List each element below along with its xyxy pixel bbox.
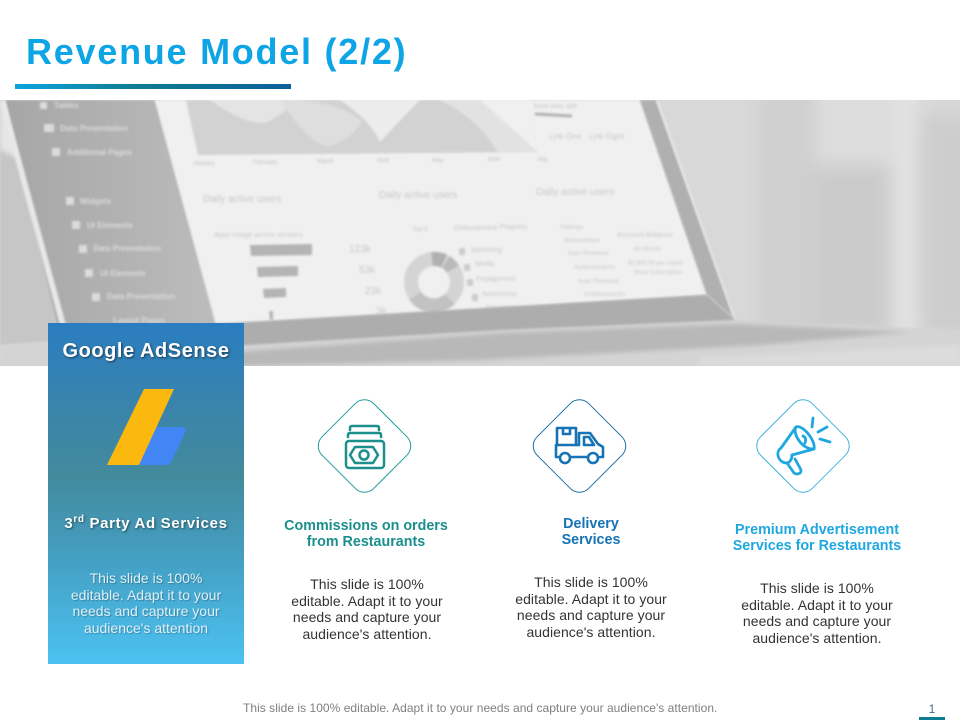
panel subheading: 3rd Party Ad Services: [64, 514, 228, 532]
background photo: laptop dashboard: Subscription: [564, 237, 600, 244]
text: commissions body: editable. Adapt it to your: [291, 592, 443, 608]
background photo: laptop dashboard: Awareness: [482, 291, 517, 298]
panel heading: Google AdSense: [62, 340, 230, 362]
background photo: laptop dashboard: Engagement: [476, 276, 516, 283]
background photo: laptop dashboard: [0, 100, 960, 366]
text: delivery body: This slide is 100%: [534, 574, 648, 590]
background photo: laptop dashboard: Daily active users: [379, 190, 457, 201]
icon: AdSense logo: [107, 389, 186, 465]
background photo: laptop dashboard: Disbursement: [454, 225, 497, 232]
icon: cash stack in diamond: [318, 399, 412, 493]
heading: delivery: Delivery: [563, 516, 619, 532]
background photo: laptop dashboard: Link One: [549, 132, 582, 141]
background photo: laptop dashboard: March: [317, 159, 334, 165]
donut: [411, 259, 457, 306]
title: Revenue Model (2/2): [26, 31, 407, 72]
background photo: laptop dashboard: ¥2,500.00 per month: [628, 261, 683, 267]
background photo: laptop dashboard: Achievements: [584, 291, 626, 298]
text: premium body: needs and capture your: [743, 613, 891, 629]
background photo: laptop dashboard: Additional Pages: [67, 148, 132, 157]
background photo: laptop dashboard: UI Elements: [87, 221, 133, 230]
title underline: [15, 84, 291, 89]
text: delivery body: needs and capture your: [517, 607, 665, 623]
background photo: laptop dashboard: Achievements: [574, 264, 616, 271]
lid right edge: [640, 100, 735, 320]
text: premium body: audience's attention.: [752, 630, 882, 646]
page number bar: [919, 717, 945, 720]
panel body text: editable. Adapt it to your: [71, 587, 221, 603]
text: commissions body: This slide is 100%: [310, 576, 424, 592]
background photo: laptop dashboard: Daily active users: [536, 187, 614, 198]
text: premium body: This slide is 100%: [760, 580, 874, 596]
panel body text: needs and capture your: [72, 603, 220, 619]
background photo: laptop dashboard: Daily active users: [203, 194, 281, 205]
page number: 1: [929, 702, 935, 716]
left background: [0, 150, 57, 344]
heading: premium advertisement: [733, 522, 901, 554]
panel body text: This slide is 100%: [90, 570, 202, 586]
background photo: laptop dashboard: Widgets: [80, 197, 112, 206]
background photo: laptop dashboard: Layout Pages: [113, 316, 166, 325]
text: premium body: [741, 580, 893, 646]
background photo: laptop dashboard: Auto Renewal: [568, 250, 609, 257]
background photo: laptop dashboard: 3k: [376, 306, 388, 317]
background photo: laptop dashboard: Education: [486, 305, 517, 312]
heading: delivery: Services: [562, 532, 620, 548]
background photo: laptop dashboard: May: [432, 158, 443, 164]
panel: Google AdSense: [48, 323, 244, 664]
heading: commissions: Commissions on orders: [284, 518, 448, 534]
screen: [155, 100, 707, 324]
sidebar: [5, 100, 216, 345]
background photo: laptop dashboard: Media: [475, 261, 494, 268]
text: delivery body: editable. Adapt it to your: [515, 590, 667, 606]
background photo: laptop dashboard: July: [537, 157, 548, 163]
heading: premium advertisement: Services for Restaurants: [733, 538, 901, 554]
background photo: laptop dashboard: UI Elements: [100, 269, 146, 278]
background photo: laptop dashboard: Link Eight: [589, 132, 625, 141]
background photo: laptop dashboard: February: [253, 160, 277, 166]
background photo: laptop dashboard: ¥2,000.00: [634, 247, 661, 253]
background photo: laptop dashboard: 23k: [365, 286, 382, 297]
background photo: laptop dashboard: Settings: [560, 224, 584, 231]
background photo: laptop dashboard: Some entry stuff: [533, 104, 577, 110]
text: commissions body: needs and capture your: [293, 609, 441, 625]
background photo: laptop dashboard: April: [377, 158, 389, 164]
background photo: laptop dashboard: June: [487, 157, 501, 163]
icon: delivery truck in diamond: [532, 399, 626, 493]
area chart: [186, 100, 572, 155]
background photo: laptop dashboard: 123k: [349, 244, 372, 255]
background photo: laptop dashboard: Data Presentation: [93, 244, 161, 253]
background photo: laptop dashboard: January: [193, 161, 214, 167]
text: premium body: editable. Adapt it to your: [741, 596, 893, 612]
icon: megaphone in diamond: [756, 399, 850, 493]
heading: premium advertisement: Premium Advertisement: [735, 522, 899, 538]
background photo: laptop dashboard: Data Presentation: [60, 124, 128, 133]
background photo: laptop dashboard: Auto Renewal: [578, 278, 619, 285]
background photo: laptop dashboard: Progress: [499, 224, 528, 231]
text: commissions body: [291, 576, 443, 642]
background photo: laptop dashboard: Tables: [54, 101, 79, 110]
background photo: laptop dashboard: Account Balance: [617, 230, 673, 239]
heading: delivery: [562, 516, 620, 548]
panel body text: [71, 570, 222, 636]
background photo: laptop dashboard: Marketing: [471, 247, 502, 254]
background photo: laptop dashboard: Apps Usage across versions: [214, 232, 303, 239]
text: commissions body: audience's attention.: [302, 626, 432, 642]
heading: commissions: [284, 518, 448, 550]
panel body text: audience's attention: [84, 620, 208, 636]
heading: commissions: from Restaurants: [307, 534, 425, 550]
text: delivery body: [515, 574, 667, 640]
bottom bezel and keyboard: [24, 328, 914, 344]
background photo: laptop dashboard: Base Subscription: [634, 270, 682, 276]
text: delivery body: audience's attention.: [526, 624, 656, 640]
footer note: This slide is 100% editable. Adapt it to your needs and capture your audience's attention.: [243, 701, 717, 715]
background photo: laptop dashboard: 53k: [359, 265, 376, 276]
background photo: laptop dashboard: Top 5: [412, 226, 428, 233]
background photo: laptop dashboard: Data Presentation: [107, 292, 175, 301]
